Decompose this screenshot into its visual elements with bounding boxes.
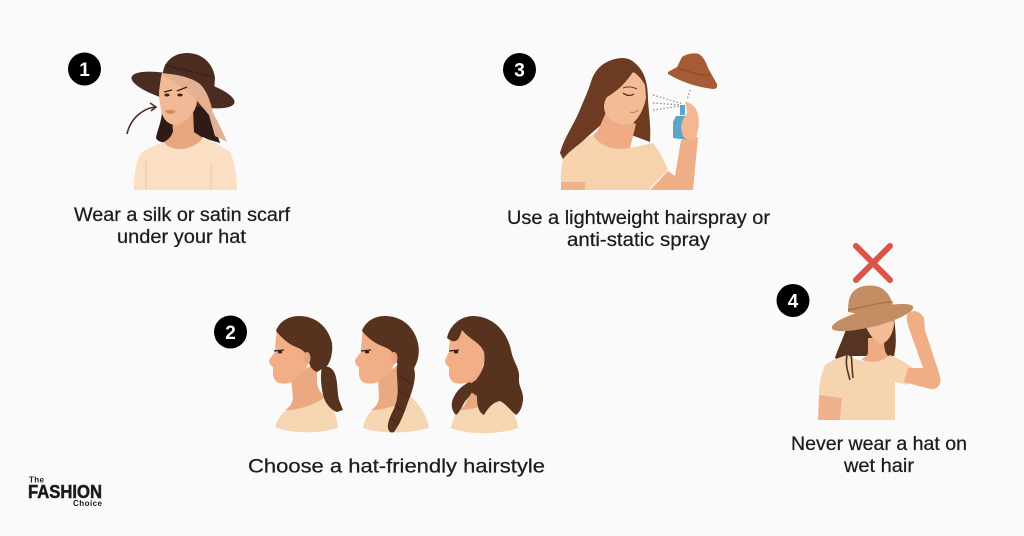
caption: tip 1 [74, 204, 291, 248]
caption: tip 3 [507, 207, 771, 251]
panel: tip 1 silk scarf [68, 52, 291, 248]
logo: The Fashion Choice [28, 476, 103, 508]
icon: spray mist dots [653, 90, 690, 110]
caption: tip 1: under your hat [117, 226, 247, 248]
panel: tip 4 wet hair warning [776, 246, 967, 477]
badge: number 4: 4 [788, 292, 799, 312]
caption: tip 3: Use a lightweight hairspray or [507, 207, 771, 229]
illustration: side braid [355, 316, 429, 433]
badge: number 1: 1 [79, 60, 90, 81]
illustration: woman in tan hat with wet hair [818, 286, 941, 420]
logo: The Fashion Choice: The [29, 476, 45, 484]
badge: number 4 [776, 284, 810, 317]
illustration: low ponytail [269, 316, 343, 432]
badge: number 3 [503, 53, 536, 86]
illustration: woman spraying hat [560, 53, 717, 190]
icon: red cross [856, 246, 890, 280]
logo: The Fashion Choice: Choice [73, 499, 103, 508]
arrow: pointing to scarf [127, 103, 156, 134]
illustration: loose waves [445, 316, 523, 433]
badge: number 2: 2 [225, 323, 236, 344]
badge: number 1 [68, 52, 101, 86]
badge: number 2 [214, 316, 247, 348]
caption: tip 3: anti-static spray [567, 229, 710, 251]
badge: number 3: 3 [514, 60, 525, 82]
illustration: woman in dark hat with scarf [128, 53, 238, 190]
panel: tip 3 hairspray [503, 53, 771, 251]
logo: The Fashion Choice: FASHION [28, 482, 102, 502]
caption: tip 2: Choose a hat-friendly hairstyle [248, 456, 545, 478]
caption: tip 4: Never wear a hat on [791, 433, 967, 455]
caption: tip 4: wet hair [843, 455, 915, 477]
caption: tip 1: Wear a silk or satin scarf [74, 204, 291, 226]
caption: tip 4 [791, 433, 967, 477]
panel: tip 2 hairstyle [214, 316, 545, 478]
